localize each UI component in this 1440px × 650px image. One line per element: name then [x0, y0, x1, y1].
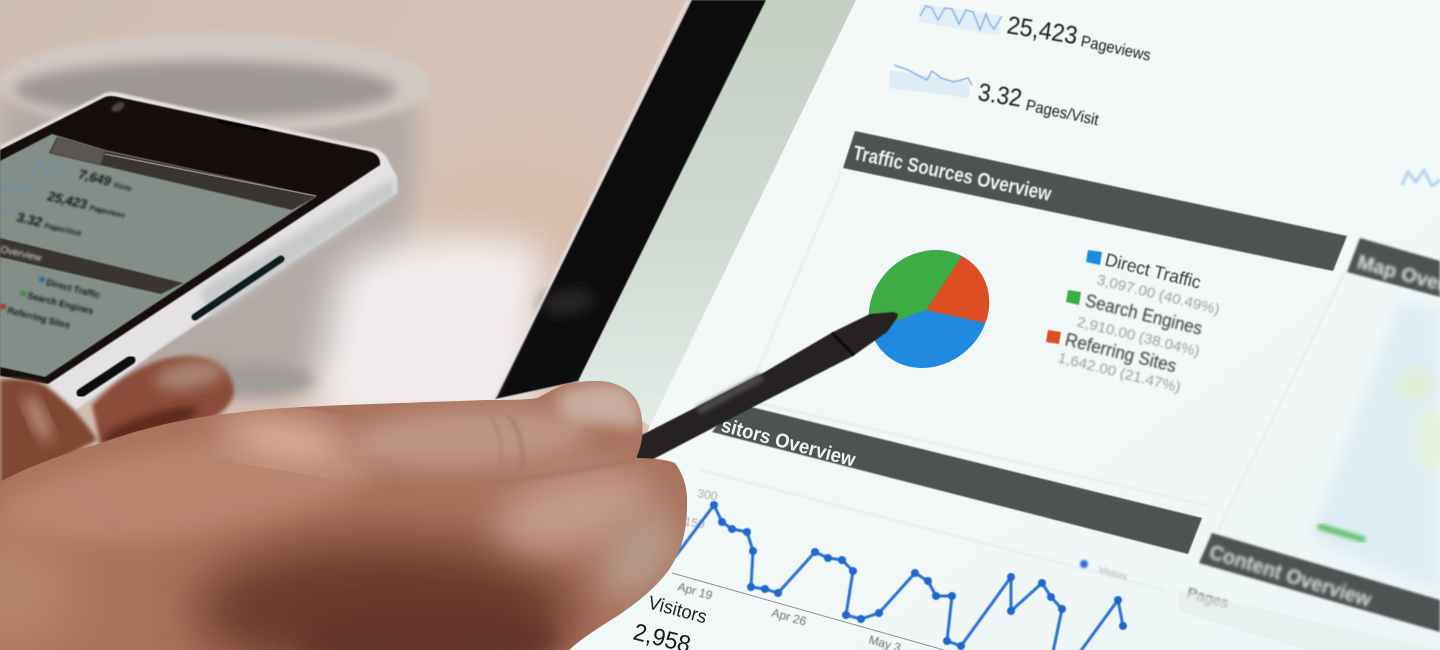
visitors stat: Visitors	[646, 593, 709, 628]
hand highlight: index finger	[349, 402, 591, 474]
map legend bar	[1318, 526, 1365, 540]
content overview subhead: Pages	[1185, 585, 1230, 613]
middle finger	[92, 356, 234, 446]
pages per visit stat: 3.32	[976, 78, 1024, 113]
hand highlight: outer edge	[588, 498, 692, 612]
legend: referring sites	[1046, 329, 1182, 396]
visitors stat	[631, 593, 709, 650]
sparkline: pages per visit	[889, 65, 972, 98]
phone stats text	[0, 166, 134, 330]
pages per visit stat	[976, 78, 1101, 129]
heading bar: visitors overview: sitors Overview	[719, 415, 858, 472]
middle finger shadow	[99, 400, 201, 450]
phone heading bar highlight	[50, 137, 105, 165]
tablet screen	[555, 0, 1440, 650]
hand highlight: thumb base	[488, 455, 662, 565]
chart legend dot	[1080, 560, 1129, 582]
chart axis labels: Apr 26	[770, 605, 808, 629]
blurred coffee cup	[0, 34, 431, 395]
phone stats text: Search Engines	[27, 290, 94, 316]
phone heading bar	[49, 137, 317, 210]
phone screen	[0, 134, 317, 377]
finger creases	[487, 415, 640, 483]
sparkline: pageviews	[918, 4, 1002, 36]
phone stats text: Direct Traffic	[46, 277, 101, 300]
cup body	[0, 100, 416, 395]
legend: direct traffic	[1086, 249, 1221, 318]
phone stats text: Referring Sites	[7, 305, 71, 330]
phone white body	[0, 92, 397, 410]
phone side button	[195, 259, 281, 317]
left thumb	[0, 379, 97, 492]
panel dividers on screen	[700, 170, 1345, 590]
phone heading bar line	[105, 154, 316, 196]
chart axis labels: Apr 19	[676, 579, 714, 603]
heading bar: traffic sources	[843, 131, 1347, 271]
legend: direct traffic: Direct Traffic	[1103, 249, 1203, 293]
pen ring	[832, 333, 854, 355]
phone speaker slit	[218, 121, 268, 131]
chart axis labels: 150	[683, 514, 706, 531]
pageviews stat: Pageviews	[1079, 33, 1152, 65]
hand highlight: knuckle	[218, 409, 352, 467]
dark shadow under cup	[205, 364, 315, 396]
phone sparklines and swatches	[0, 162, 76, 309]
legend: referring sites: 1,642.00 (21.47%)	[1056, 349, 1182, 396]
pie chart	[868, 250, 990, 368]
heading bar: visitors overview	[712, 403, 1202, 554]
legend: search engines: Search Engines	[1083, 290, 1204, 339]
phone stats text: 25,423 Pageviews	[45, 188, 127, 221]
visitors line chart	[672, 486, 1129, 650]
stylus pen	[630, 312, 898, 466]
faint bezel highlight	[495, 0, 688, 398]
pages per visit stat: Pages/Visit	[1024, 97, 1101, 129]
phone stats text: 7,649 Visits	[77, 166, 134, 194]
hand shade: left bottom	[0, 538, 69, 645]
small sparkline right	[1402, 170, 1440, 186]
pen grip	[698, 377, 762, 411]
legend	[1046, 249, 1221, 396]
phone side shading	[200, 178, 397, 318]
map panel	[1310, 300, 1440, 590]
chart legend dot: Visitors	[1097, 564, 1129, 582]
legend: search engines	[1066, 290, 1204, 360]
left thumb highlight	[20, 391, 56, 445]
heading bar: content overview	[1199, 533, 1440, 632]
legend: direct traffic: 3,097.00 (40.49%)	[1095, 271, 1221, 318]
pageviews stat	[1005, 11, 1152, 65]
tablet glass edge	[578, 0, 856, 426]
middle finger highlight	[152, 355, 228, 395]
hand shade: back of hand	[8, 440, 372, 544]
chart axis labels	[676, 486, 903, 650]
legend: referring sites: Referring Sites	[1063, 329, 1178, 376]
tablet black bezel	[495, 0, 766, 399]
blurred white saucer	[315, 236, 545, 425]
legend: search engines: 2,910.00 (38.04%)	[1075, 313, 1201, 360]
cup rim	[0, 34, 431, 134]
cup interior	[13, 61, 397, 119]
fingernail	[555, 382, 642, 428]
line markers	[710, 501, 1127, 650]
phone stats text: Overview	[0, 244, 43, 264]
pen body	[630, 312, 898, 466]
chart axis labels: 300	[696, 486, 719, 503]
phone stats text: 3.32 Pages/Visit	[15, 209, 84, 239]
main hand holding stylus	[0, 370, 700, 650]
phone black face	[0, 96, 380, 384]
heading bar: content overview: Content Overview	[1207, 541, 1375, 612]
hand shade: lower dark core	[307, 618, 567, 650]
line series	[675, 505, 1123, 650]
pageviews stat: 25,423	[1005, 11, 1080, 50]
phone camera	[110, 100, 126, 114]
bezel reflection	[540, 286, 596, 318]
phone lower side button	[81, 360, 131, 393]
heading bar: traffic sources: Traffic Sources Overview	[851, 142, 1053, 206]
hand shade: dark lower palm	[195, 540, 575, 650]
fingers holding phone	[0, 355, 234, 492]
phone second heading bar	[0, 238, 183, 294]
smartphone	[0, 92, 397, 410]
chart axis	[672, 573, 944, 650]
